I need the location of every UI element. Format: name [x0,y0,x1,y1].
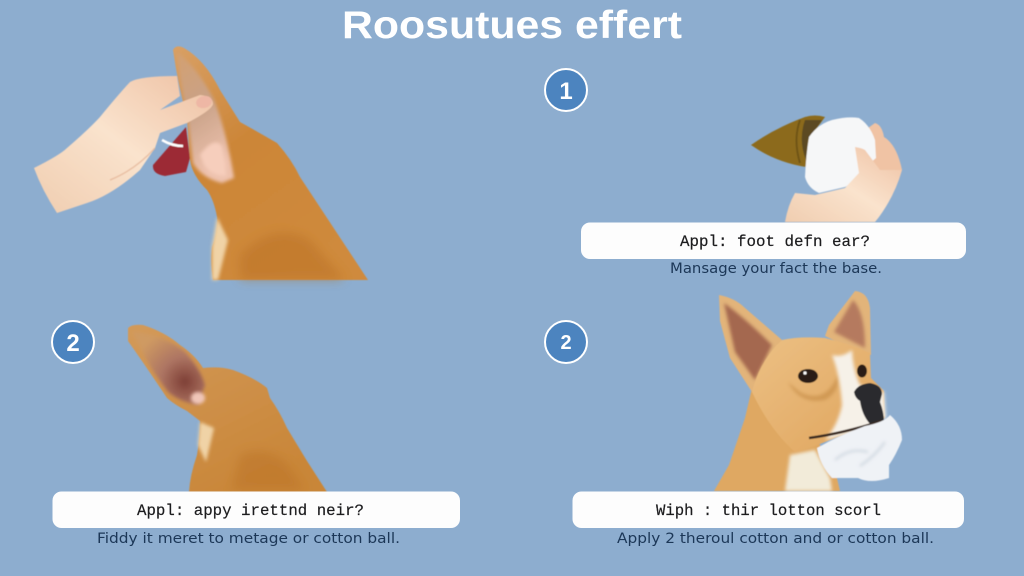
left ear [719,295,782,392]
cotton [817,415,902,481]
step 2 badge [52,321,94,363]
step 3 badge: 2 [560,332,572,354]
hand [785,147,902,222]
step 3 caption [572,492,964,547]
fingers behind ear [153,127,190,176]
dog neck and ear [173,46,368,280]
title: Roosutues effert [342,4,682,47]
muzzle white [825,350,886,440]
hand [34,76,213,213]
caption description: Fiddy it meret to metage or cotton ball. [97,531,400,547]
nose [854,383,884,424]
illustration: dog ear raised [128,325,327,492]
inner ear [133,332,205,405]
neck [714,388,840,491]
cotton ball [805,117,876,193]
mouth [809,421,882,438]
caption heading: Appl: appy irettnd neir? [137,502,364,520]
eyes [798,364,867,383]
caption description: Apply 2 theroul cotton and or cotton ball. [617,531,934,547]
step 3 badge [545,321,587,363]
step 1 badge [545,69,587,111]
caption heading: Appl: foot defn ear? [680,233,870,251]
illustration: hand with cotton ball and cone [751,116,902,222]
caption description: Mansage your fact the base. [670,261,882,277]
caption pill [581,222,966,259]
caption pill [52,492,460,528]
head [752,337,885,452]
step 2 badge: 2 [66,330,80,357]
illustration: dog with cotton under chin [714,291,902,491]
caption pill [572,492,964,528]
caption heading: Wiph : thir lotton scorl [656,502,881,520]
chest shading [232,451,305,490]
step 1 caption [581,222,966,277]
ear base pink [191,392,205,404]
right ear [825,291,871,355]
eye shading [788,375,838,401]
step 2 caption [52,492,460,547]
step 1 badge: 1 [559,78,573,105]
illustration: hand holding dog ear [34,46,368,280]
fingers behind ball [868,123,902,180]
cone [751,116,825,167]
